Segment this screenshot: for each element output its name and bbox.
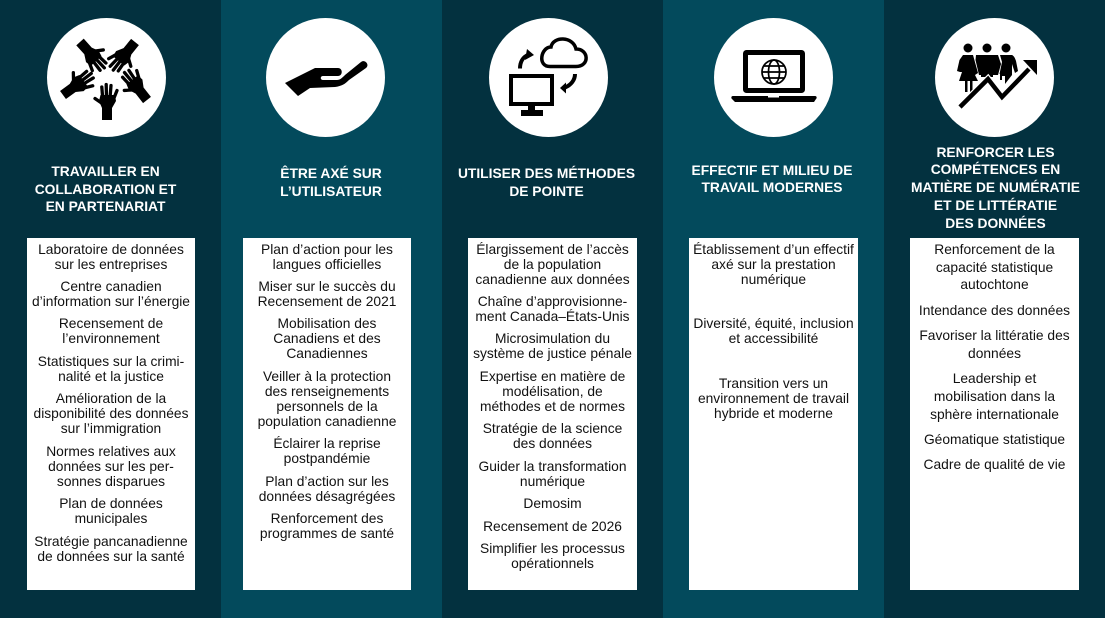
list: initiatives: Établissement d’un effectif bbox=[693, 242, 854, 257]
list: initiatives: postpandémie bbox=[284, 451, 370, 466]
heading bbox=[911, 144, 1080, 231]
list: initiatives: nalité et la justice bbox=[58, 369, 164, 384]
list: initiatives: Stratégie de la science bbox=[483, 421, 622, 436]
list: initiatives: Demosim bbox=[523, 496, 582, 511]
list: initiatives: personnels de la bbox=[276, 399, 378, 414]
list: initiatives: modélisation, de bbox=[502, 384, 603, 399]
list: initiatives: de la population bbox=[504, 257, 601, 272]
list: initiatives: Renforcement de la bbox=[934, 242, 1055, 257]
list: initiatives: Leadership et bbox=[953, 371, 1036, 386]
heading: DE POINTE bbox=[509, 184, 584, 198]
list: initiatives: capacité statistique bbox=[936, 260, 1053, 274]
heading: EN PARTENARIAT bbox=[46, 199, 165, 214]
heading: ET DE LITTÉRATIE bbox=[934, 198, 1057, 213]
list: initiatives: données désagrégées bbox=[259, 489, 395, 504]
list: initiatives: Plan d’action sur les bbox=[265, 474, 389, 489]
list: initiatives: numérique bbox=[520, 474, 585, 489]
list: initiatives: Renforcement des bbox=[271, 511, 383, 526]
list: initiatives: langues officielles bbox=[273, 257, 381, 272]
heading bbox=[280, 166, 382, 198]
list: initiatives: numérique bbox=[741, 272, 806, 287]
heading bbox=[35, 164, 176, 214]
list: initiatives: environnement de travail bbox=[698, 391, 849, 406]
heading: COLLABORATION ET bbox=[35, 182, 176, 196]
heading: ÊTRE AXÉ SUR bbox=[280, 166, 382, 181]
list: initiatives: ment Canada–États-Unis bbox=[475, 309, 630, 324]
list: initiatives: Amélioration de la bbox=[56, 391, 166, 406]
list: initiatives: sphère internationale bbox=[930, 407, 1059, 422]
list: initiatives: données bbox=[968, 346, 1021, 361]
list: initiatives: système de justice pénale bbox=[473, 346, 632, 361]
heading bbox=[458, 166, 635, 198]
list: initiatives: Microsimulation du bbox=[495, 331, 610, 346]
list: initiatives: de données sur la santé bbox=[37, 549, 185, 564]
list: initiatives: Stratégie pancanadienne bbox=[34, 534, 188, 549]
list: initiatives: Expertise en matière de bbox=[480, 369, 625, 384]
list: initiatives: autochtone bbox=[960, 277, 1029, 292]
list: initiatives: des renseignements bbox=[265, 384, 389, 399]
heading: TRAVAILLER EN bbox=[51, 164, 160, 179]
heading: COMPÉTENCES EN bbox=[931, 162, 1060, 177]
icon: computer and cloud bbox=[489, 18, 608, 137]
list: initiatives: municipales bbox=[75, 511, 147, 526]
list: initiatives: Recensement de 2021 bbox=[258, 294, 396, 309]
icon: people and rising arrow bbox=[935, 18, 1054, 137]
list: initiatives: Statistiques sur la crimi- bbox=[38, 354, 184, 369]
panel: travailler en collaboration bbox=[0, 0, 221, 618]
list: initiatives: d’information sur l’énergie bbox=[32, 294, 190, 309]
list: initiatives: Diversité, équité, inclusion bbox=[693, 316, 854, 331]
list: initiatives: Plan d’action pour les bbox=[261, 242, 393, 257]
list: initiatives: Favoriser la littératie des bbox=[919, 328, 1070, 343]
list: initiatives: programmes de santé bbox=[260, 526, 394, 541]
list: initiatives bbox=[243, 238, 411, 590]
panel: être axé sur l'utilisateur bbox=[221, 0, 442, 618]
list: initiatives: Chaîne d’approvisionne- bbox=[478, 294, 627, 309]
list: initiatives: sonnes disparues bbox=[57, 474, 165, 489]
list: initiatives: Normes relatives aux bbox=[46, 444, 176, 459]
panel: effectif et milieu de travail modernes bbox=[663, 0, 884, 618]
list: initiatives: Simplifier les processus bbox=[480, 541, 625, 556]
heading: UTILISER DES MÉTHODES bbox=[458, 166, 635, 181]
list: initiatives: Transition vers un bbox=[719, 376, 828, 391]
list: initiatives: Mobilisation des bbox=[278, 316, 376, 331]
list: initiatives: méthodes et de normes bbox=[480, 399, 625, 414]
list: initiatives: et accessibilité bbox=[729, 331, 818, 346]
list: initiatives: des données bbox=[513, 436, 592, 451]
list: initiatives: Géomatique statistique bbox=[924, 432, 1065, 447]
list: initiatives: hybride et moderne bbox=[714, 406, 833, 421]
list: initiatives: Plan de données bbox=[59, 496, 163, 511]
list: initiatives: canadienne aux données bbox=[475, 272, 630, 287]
list: initiatives: axé sur la prestation bbox=[711, 257, 836, 272]
list: initiatives: Éclairer la reprise bbox=[273, 436, 381, 451]
list: initiatives: Centre canadien bbox=[60, 279, 162, 294]
list: initiatives: Guider la transformation bbox=[478, 459, 626, 474]
list: initiatives: mobilisation dans la bbox=[934, 389, 1055, 404]
list: initiatives: Canadiens et des bbox=[273, 331, 381, 346]
list: initiatives: population canadienne bbox=[258, 414, 396, 429]
list: initiatives: sur les entreprises bbox=[55, 257, 167, 272]
list: initiatives: Recensement de bbox=[59, 316, 163, 331]
heading: EFFECTIF ET MILIEU DE bbox=[692, 163, 852, 178]
list: initiatives: Miser sur le succès du bbox=[258, 279, 396, 294]
list: initiatives: disponibilité des données bbox=[34, 406, 188, 421]
heading: RENFORCER LES bbox=[936, 144, 1055, 160]
list: initiatives: opérationnels bbox=[511, 556, 594, 571]
list: initiatives bbox=[689, 238, 858, 590]
list: initiatives: Canadiennes bbox=[286, 346, 368, 361]
icon: five hands bbox=[47, 18, 166, 137]
list: initiatives: Veiller à la protection bbox=[263, 369, 391, 384]
heading: DES DONNÉES bbox=[945, 216, 1046, 231]
heading: TRAVAIL MODERNES bbox=[701, 180, 843, 195]
heading: MATIÈRE DE NUMÉRATIE bbox=[911, 180, 1080, 195]
icon: laptop with globe bbox=[714, 18, 833, 137]
list: initiatives: données sur les per- bbox=[48, 459, 174, 474]
panel: utiliser des méthodes de pointe bbox=[442, 0, 663, 618]
list: initiatives: Élargissement de l’accès bbox=[476, 242, 629, 257]
panel: renforcer les compétences bbox=[884, 0, 1105, 618]
heading bbox=[692, 163, 852, 195]
list: initiatives: Laboratoire de données bbox=[38, 242, 184, 257]
list: initiatives: sur l’immigration bbox=[61, 421, 161, 436]
heading: L’UTILISATEUR bbox=[280, 184, 382, 198]
list: initiatives: l’environnement bbox=[62, 331, 160, 346]
list: initiatives bbox=[27, 238, 195, 590]
list: initiatives bbox=[910, 238, 1079, 590]
list: initiatives: Recensement de 2026 bbox=[483, 519, 622, 534]
icon: open hand bbox=[266, 18, 385, 137]
list: initiatives: Intendance des données bbox=[919, 303, 1070, 318]
list: initiatives bbox=[468, 238, 637, 590]
list: initiatives: Cadre de qualité de vie bbox=[924, 457, 1065, 472]
